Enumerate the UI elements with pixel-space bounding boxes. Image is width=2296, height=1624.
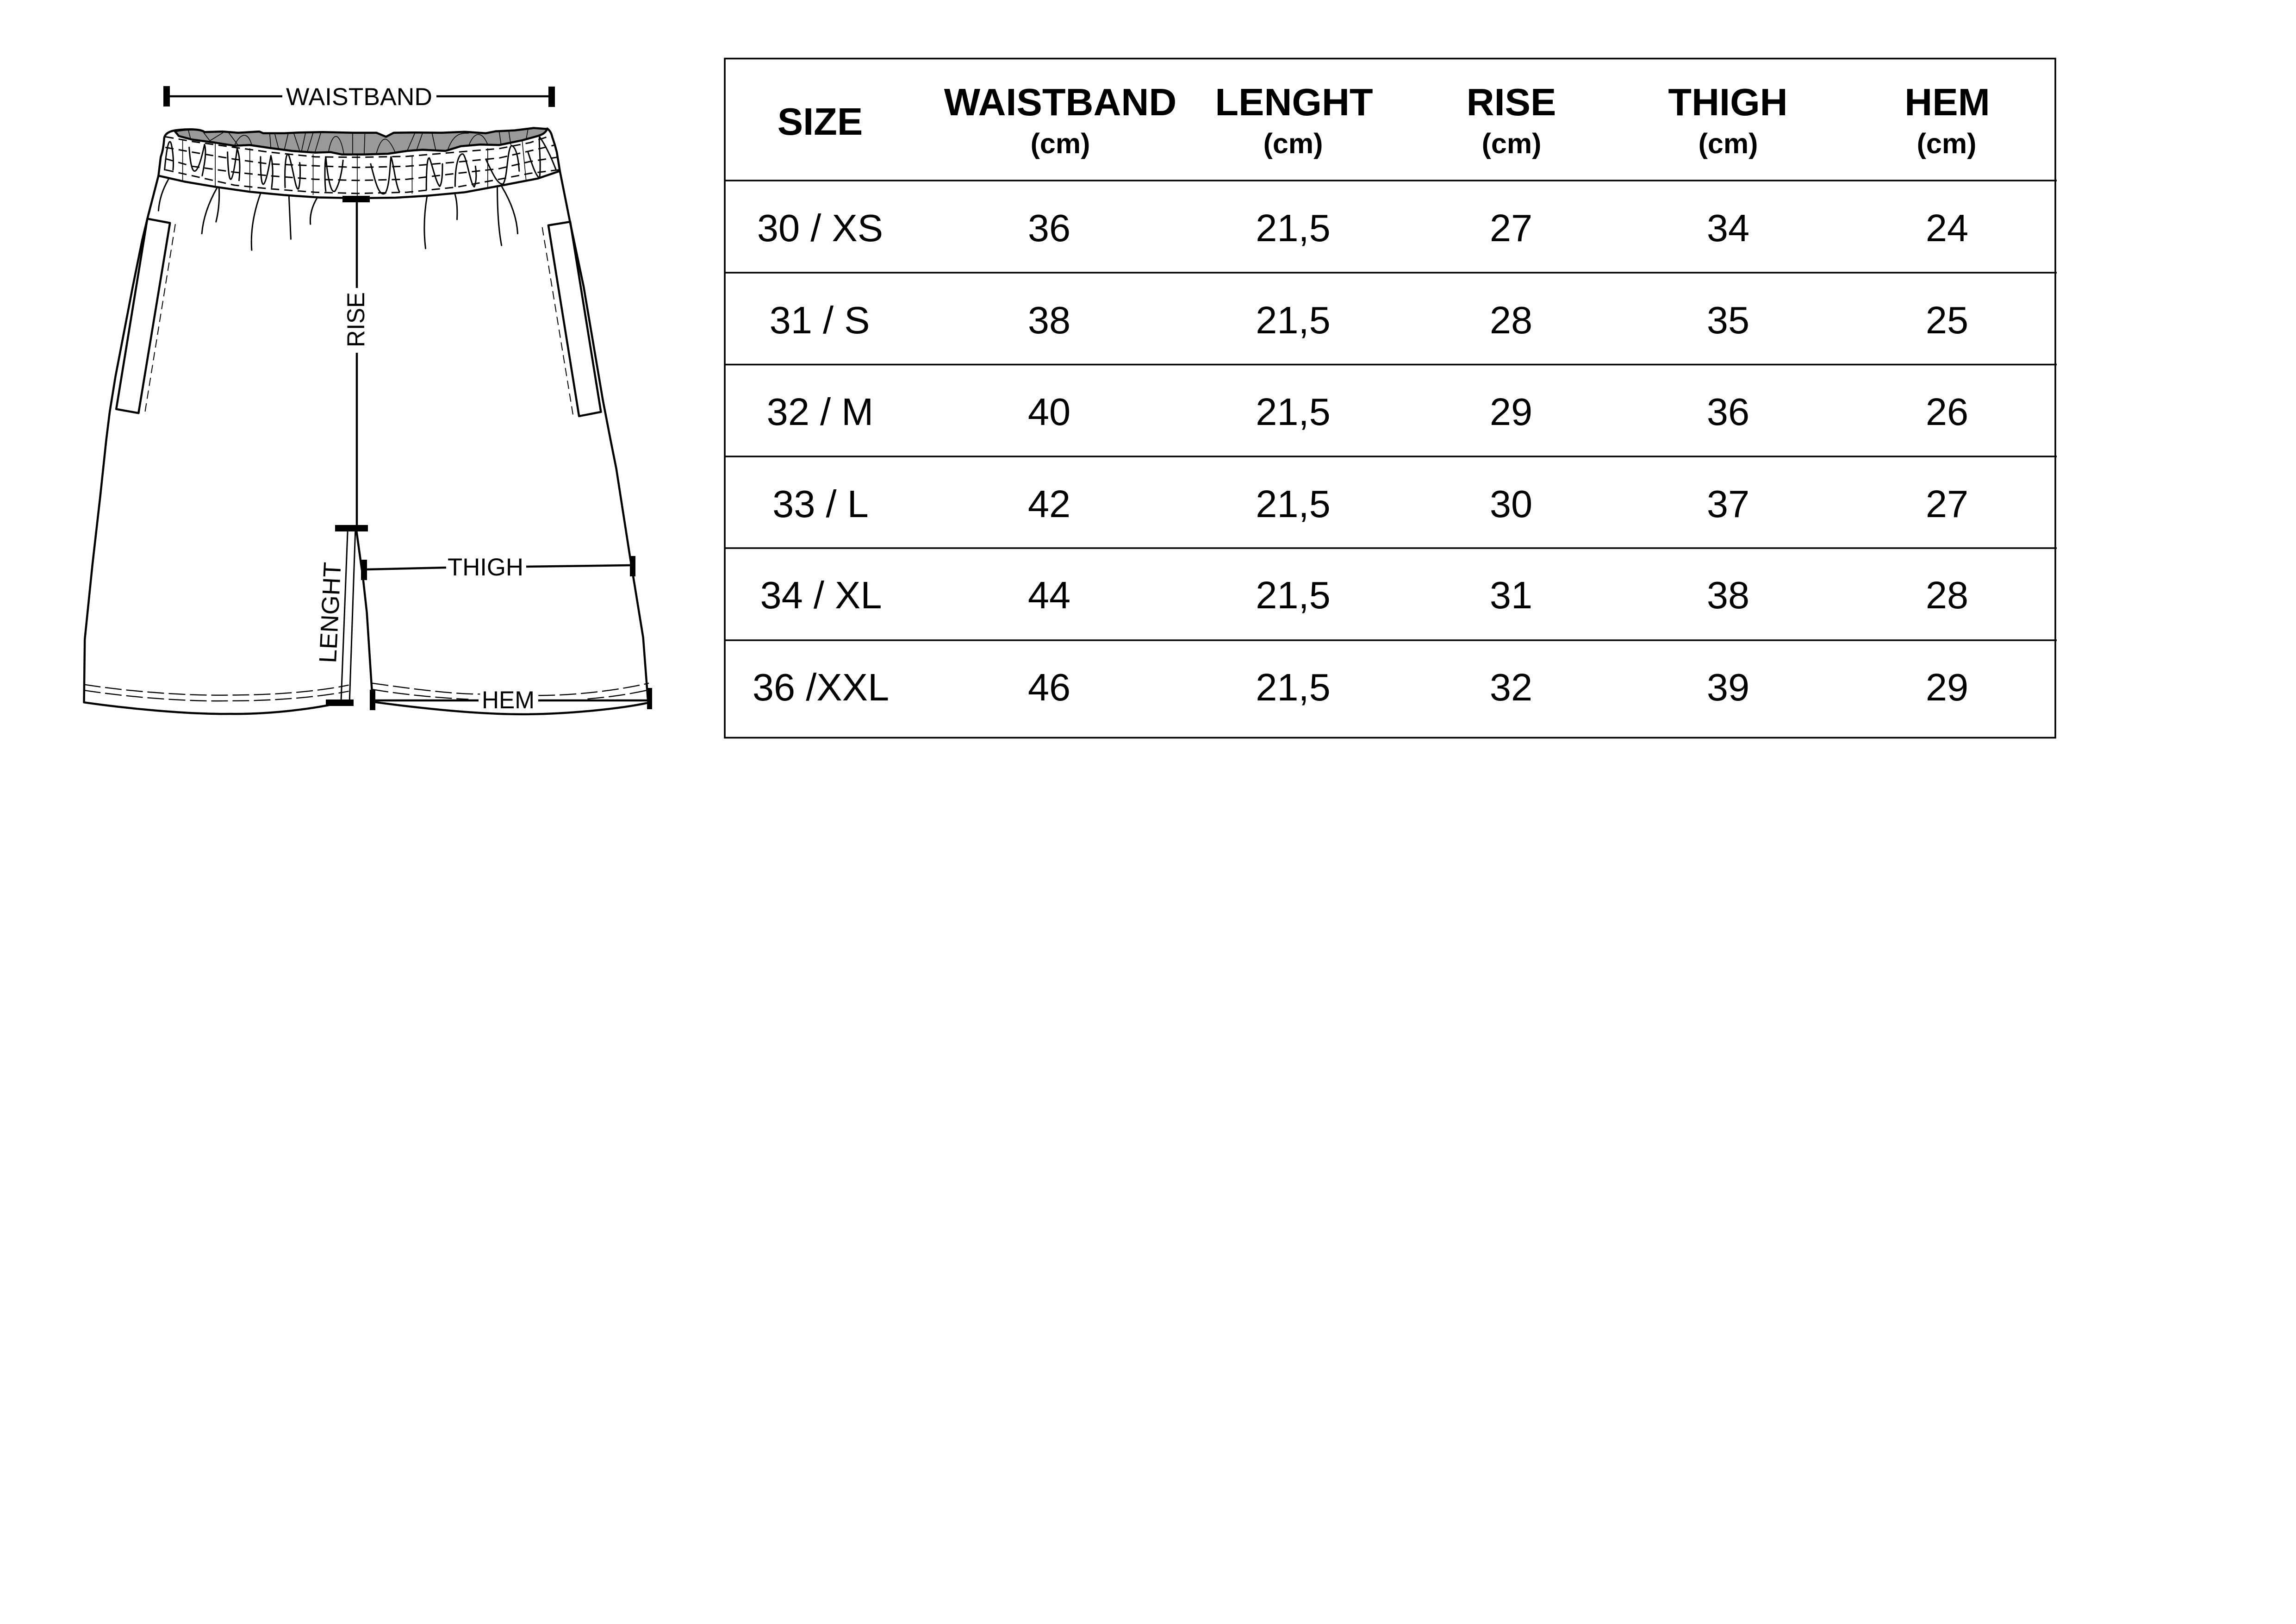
size table bbox=[725, 58, 2057, 738]
right leg outline bbox=[356, 440, 648, 714]
waistband outline bbox=[158, 129, 560, 176]
row 32 / M: 21,5 bbox=[1256, 390, 1331, 433]
row 36 /XXL: 32 bbox=[1490, 666, 1532, 709]
table header row: RISE bbox=[1467, 81, 1556, 124]
upper shorts: waistband, pockets, pleats bbox=[106, 128, 610, 440]
table header row: (cm) bbox=[1699, 128, 1758, 159]
hem measurement: HEM bbox=[482, 687, 535, 714]
rise measurement: RISE bbox=[342, 292, 370, 347]
table header row: (cm) bbox=[1482, 128, 1541, 159]
left pocket bbox=[116, 219, 175, 414]
row 36 /XXL: 29 bbox=[1926, 666, 1968, 709]
left leg outline bbox=[84, 440, 338, 714]
table header row: HEM bbox=[1904, 81, 1990, 124]
row 30 / XS: 27 bbox=[1490, 206, 1532, 250]
row 30 / XS: 30 / XS bbox=[757, 206, 883, 250]
row 33 / L: 37 bbox=[1707, 482, 1749, 525]
waist seam bbox=[158, 171, 560, 198]
inner waistband opening bbox=[175, 128, 547, 155]
row 30 / XS: 36 bbox=[1028, 206, 1070, 250]
row 31 / S: 35 bbox=[1707, 299, 1749, 342]
row 32 / M: 32 / M bbox=[767, 390, 873, 433]
right hem stitching bbox=[372, 683, 649, 700]
row 33 / L: 21,5 bbox=[1256, 482, 1331, 525]
shorts technical drawing with measurements bbox=[84, 83, 652, 714]
row 34 / XL: 31 bbox=[1490, 574, 1532, 617]
pleats below waist bbox=[158, 179, 518, 250]
waistband gather loops bbox=[165, 137, 556, 194]
inner waistband gathers bbox=[188, 129, 528, 155]
row 31 / S: 38 bbox=[1028, 299, 1070, 342]
hem measurement bbox=[370, 687, 652, 714]
row 34 / XL: 21,5 bbox=[1256, 574, 1331, 617]
row 36 /XXL: 36 /XXL bbox=[753, 666, 889, 709]
row 31 / S: 31 / S bbox=[770, 299, 870, 342]
table header row: (cm) bbox=[1263, 128, 1323, 159]
row 32 / M: 40 bbox=[1028, 390, 1070, 433]
row 31 / S: 21,5 bbox=[1256, 299, 1331, 342]
row 34 / XL: 34 / XL bbox=[760, 574, 882, 617]
row 34 / XL bbox=[760, 574, 1968, 617]
row 31 / S: 28 bbox=[1490, 299, 1532, 342]
row 30 / XS: 34 bbox=[1707, 206, 1749, 250]
table header row: (cm) bbox=[1917, 128, 1976, 159]
waistband vertical gathers bbox=[183, 140, 526, 196]
row 33 / L: 30 bbox=[1490, 482, 1532, 525]
row 34 / XL: 44 bbox=[1028, 574, 1070, 617]
row 36 /XXL bbox=[753, 666, 1968, 709]
table header row: WAISTBAND bbox=[944, 81, 1176, 124]
table header row: (cm) bbox=[1031, 128, 1090, 159]
left hem stitching bbox=[84, 685, 349, 701]
table header row: LENGHT bbox=[1215, 81, 1373, 124]
row 33 / L: 42 bbox=[1028, 482, 1070, 525]
rise measurement bbox=[335, 196, 370, 531]
length measurement bbox=[314, 562, 354, 706]
row 32 / M: 29 bbox=[1490, 390, 1532, 433]
thigh measurement bbox=[361, 554, 635, 581]
table header row bbox=[778, 81, 1990, 159]
thigh measurement: THIGH bbox=[448, 554, 523, 581]
waistband measurement: WAISTBAND bbox=[286, 83, 432, 111]
row 33 / L bbox=[772, 482, 1968, 525]
left inseam double line bbox=[341, 531, 355, 700]
row 34 / XL: 28 bbox=[1926, 574, 1968, 617]
table header row: THIGH bbox=[1668, 81, 1788, 124]
row 36 /XXL: 21,5 bbox=[1256, 666, 1331, 709]
table header row: SIZE bbox=[778, 100, 863, 143]
row 33 / L: 33 / L bbox=[772, 482, 869, 525]
row 30 / XS: 21,5 bbox=[1256, 206, 1331, 250]
row 30 / XS bbox=[757, 206, 1968, 250]
row 32 / M: 26 bbox=[1926, 390, 1968, 433]
row 34 / XL: 38 bbox=[1707, 574, 1749, 617]
row 32 / M bbox=[767, 390, 1968, 433]
lower shorts: legs and hems bbox=[84, 440, 649, 714]
length measurement: LENGHT bbox=[314, 562, 347, 664]
table frame and row rules bbox=[725, 58, 2057, 738]
row 33 / L: 27 bbox=[1926, 482, 1968, 525]
waistband stitching rows bbox=[165, 136, 559, 194]
row 31 / S bbox=[770, 299, 1968, 342]
row 31 / S: 25 bbox=[1926, 299, 1968, 342]
upper side seams bbox=[106, 171, 610, 440]
row 30 / XS: 24 bbox=[1926, 206, 1968, 250]
row 32 / M: 36 bbox=[1707, 390, 1749, 433]
right pocket bbox=[542, 222, 601, 417]
row 36 /XXL: 46 bbox=[1028, 666, 1070, 709]
waistband measurement bbox=[163, 83, 555, 111]
row 36 /XXL: 39 bbox=[1707, 666, 1749, 709]
